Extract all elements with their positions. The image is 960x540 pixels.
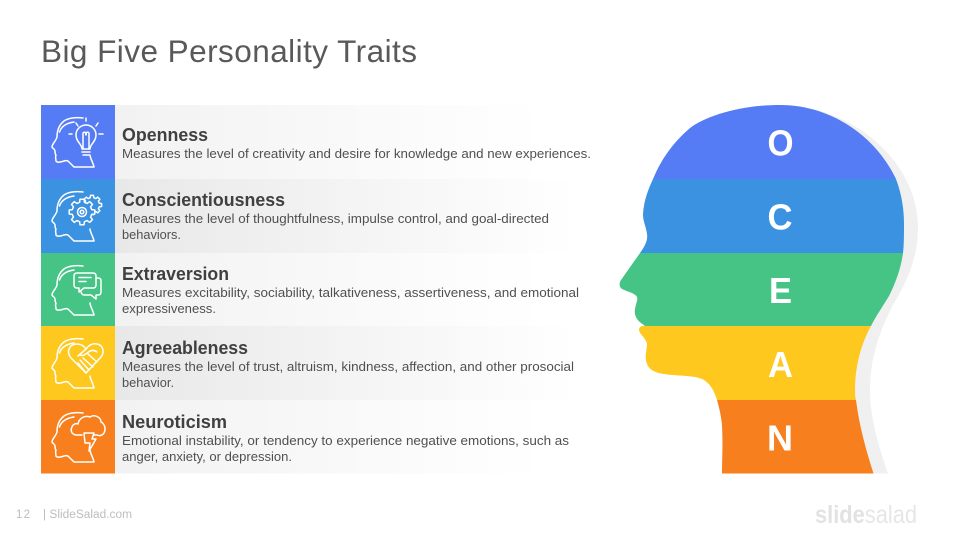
icon tile: [41, 253, 115, 326]
band A: [639, 326, 871, 400]
icon: head with lightbulb: [52, 118, 103, 167]
description: Measures the level of thoughtfulness, impulse control, and goal-directed: [122, 212, 549, 226]
description: Measures the level of trust, altruism, kindness, affection, and other prosocial: [122, 360, 574, 374]
description: [122, 360, 574, 390]
band O: O: [768, 122, 794, 164]
description: behavior.: [122, 376, 174, 390]
description: Measures the level of creativity and desire for knowledge and new experiences.: [122, 147, 591, 161]
heading: Agreeableness: [122, 338, 248, 358]
row background: [115, 326, 600, 400]
description: [122, 286, 579, 316]
band N: N: [767, 418, 793, 458]
panel: neuroticism row: [41, 400, 600, 474]
icon tile: [41, 179, 115, 253]
row background: [115, 105, 600, 179]
heading: Extraversion: [122, 264, 229, 284]
icon: head with speech bubbles: [52, 266, 101, 315]
heading: Neuroticism: [122, 412, 227, 432]
footer site name: | SlideSalad.com: [43, 509, 132, 521]
band A: A: [768, 344, 793, 385]
row background: [115, 400, 600, 474]
head shadow: [780, 105, 918, 474]
description: Emotional instability, or tendency to experience negative emotions, such as: [122, 434, 569, 448]
panel: conscientiousness row: [41, 179, 600, 253]
description: Measures excitability, sociability, talkativeness, assertiveness, and emotional: [122, 286, 579, 300]
icon: head with storm cloud: [52, 413, 105, 462]
description: anger, anxiety, or depression.: [122, 450, 292, 464]
description: [122, 434, 569, 464]
heading: Conscientiousness: [122, 190, 285, 210]
band O: [653, 105, 896, 179]
row background: [115, 253, 600, 326]
band C: [640, 179, 904, 253]
band E: [620, 253, 903, 326]
chart: OCEAN head: [620, 105, 918, 474]
icon tile: [41, 105, 115, 179]
band N: [717, 400, 874, 474]
panel: extraversion row: [41, 253, 600, 326]
description: behaviors.: [122, 228, 181, 242]
icon tile: [41, 400, 115, 474]
panel: agreeableness row: [41, 326, 600, 400]
heading: Openness: [122, 125, 208, 145]
description: [122, 212, 549, 242]
logo: slidesalad: [815, 501, 917, 529]
title: Big Five Personality Traits: [41, 33, 417, 69]
icon tile: [41, 326, 115, 400]
icon: head with gears: [52, 192, 102, 241]
page number: 12: [16, 509, 30, 521]
icon: head with heart handshake: [52, 339, 103, 388]
row background: [115, 179, 600, 253]
description: expressiveness.: [122, 302, 216, 316]
band C: C: [768, 196, 792, 238]
panel: openness row: [41, 105, 600, 179]
band E: E: [769, 270, 792, 311]
